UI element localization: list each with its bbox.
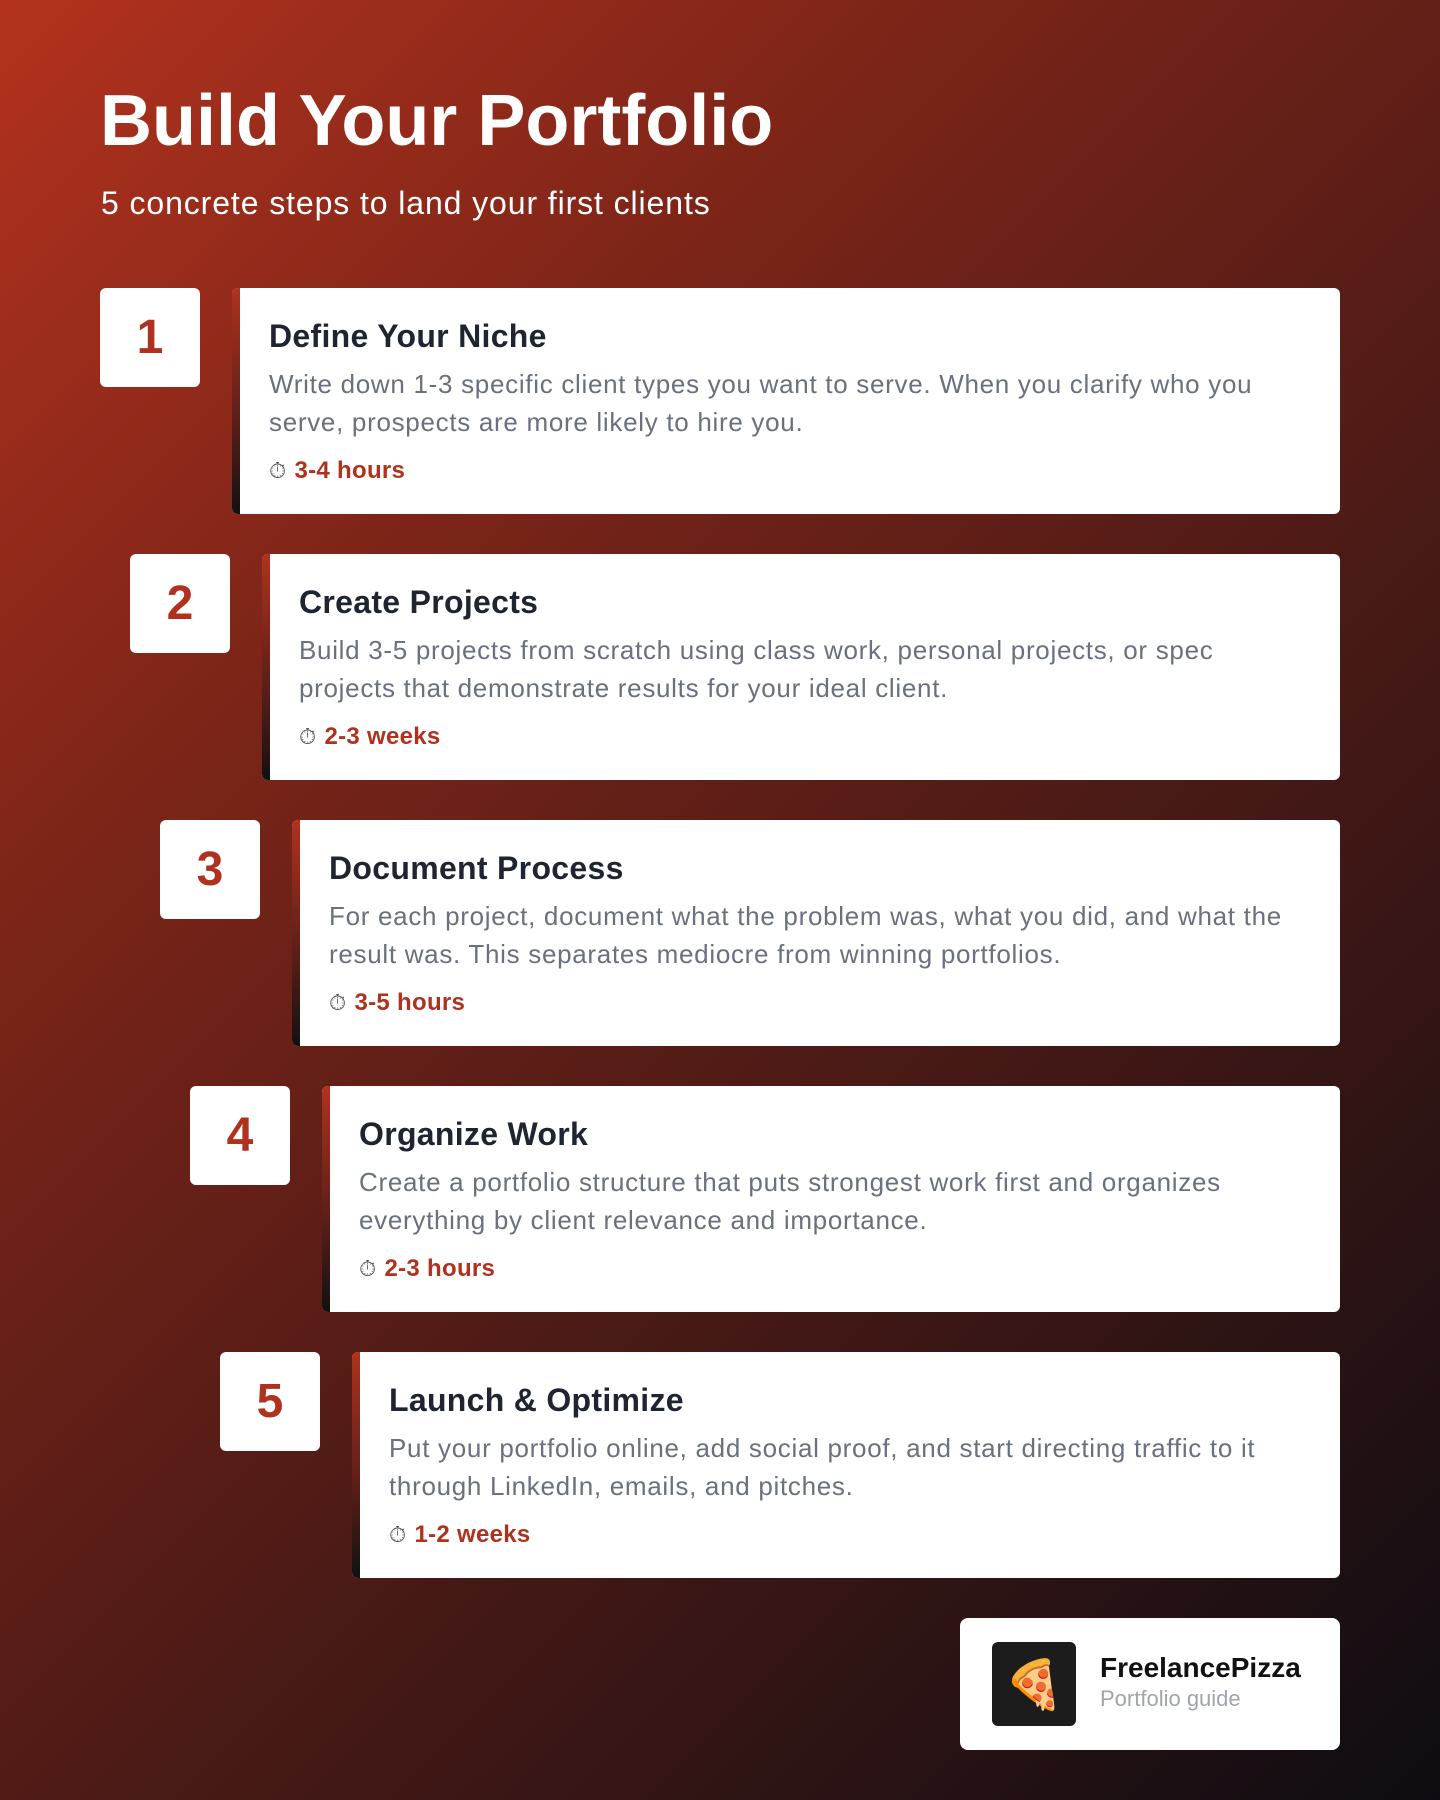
step 3 card: For each project, document what the problem was, what you did, and what the result was. This separates mediocre from winning portfolios. xyxy=(329,901,1282,969)
step 3 number xyxy=(160,820,260,919)
step 5 card: Put your portfolio online, add social proof, and start directing traffic to it through LinkedIn, emails, and pitches. xyxy=(389,1433,1255,1501)
step 5 card: Launch & Optimize xyxy=(389,1382,684,1418)
step 4 number: 4 xyxy=(227,1109,253,1162)
brand text xyxy=(1100,1652,1301,1711)
step 4 card xyxy=(322,1086,1340,1312)
step 2 number: 2 xyxy=(167,577,193,630)
step 4 number xyxy=(190,1086,290,1185)
step 1 number xyxy=(100,288,200,387)
step 5 card xyxy=(352,1352,1340,1578)
step 4 card: Create a portfolio structure that puts strongest work first and organizes everything by client relevance and importance. xyxy=(359,1167,1221,1235)
icon: pizza: 🍕 xyxy=(1004,1658,1064,1712)
step 1 number: 1 xyxy=(137,311,163,364)
step 2 card: Create Projects xyxy=(299,584,538,620)
icon: pizza xyxy=(992,1642,1076,1726)
step 3 number: 3 xyxy=(197,843,223,896)
step 5 number: 5 xyxy=(257,1375,283,1428)
brand text: FreelancePizza xyxy=(1100,1652,1301,1683)
step 1 card: Write down 1-3 specific client types you want to serve. When you clarify who you serve, prospects are more likely to hire you. xyxy=(269,369,1252,437)
title: Build Your Portfolio xyxy=(100,81,773,161)
step 1 card: Define Your Niche xyxy=(269,318,547,354)
step 2 card: ⏱ 2-3 weeks xyxy=(299,723,441,750)
step 1 card: ⏱ 3-4 hours xyxy=(269,457,405,484)
step 2 number xyxy=(130,554,230,653)
subtitle: 5 concrete steps to land your first clients xyxy=(101,185,711,221)
step 5 card: ⏱ 1-2 weeks xyxy=(389,1521,531,1548)
footer brand xyxy=(960,1618,1340,1750)
step 1 card xyxy=(232,288,1340,514)
step 3 card xyxy=(292,820,1340,1046)
step 4 card: ⏱ 2-3 hours xyxy=(359,1255,495,1282)
step 2 card xyxy=(262,554,1340,780)
step 5 number xyxy=(220,1352,320,1451)
step 2 card: Build 3-5 projects from scratch using class work, personal projects, or spec projects that demonstrate results for your ideal client. xyxy=(299,635,1213,703)
step 3 card: ⏱ 3-5 hours xyxy=(329,989,465,1016)
brand text: Portfolio guide xyxy=(1100,1686,1241,1711)
step 4 card: Organize Work xyxy=(359,1116,588,1152)
step 3 card: Document Process xyxy=(329,850,624,886)
